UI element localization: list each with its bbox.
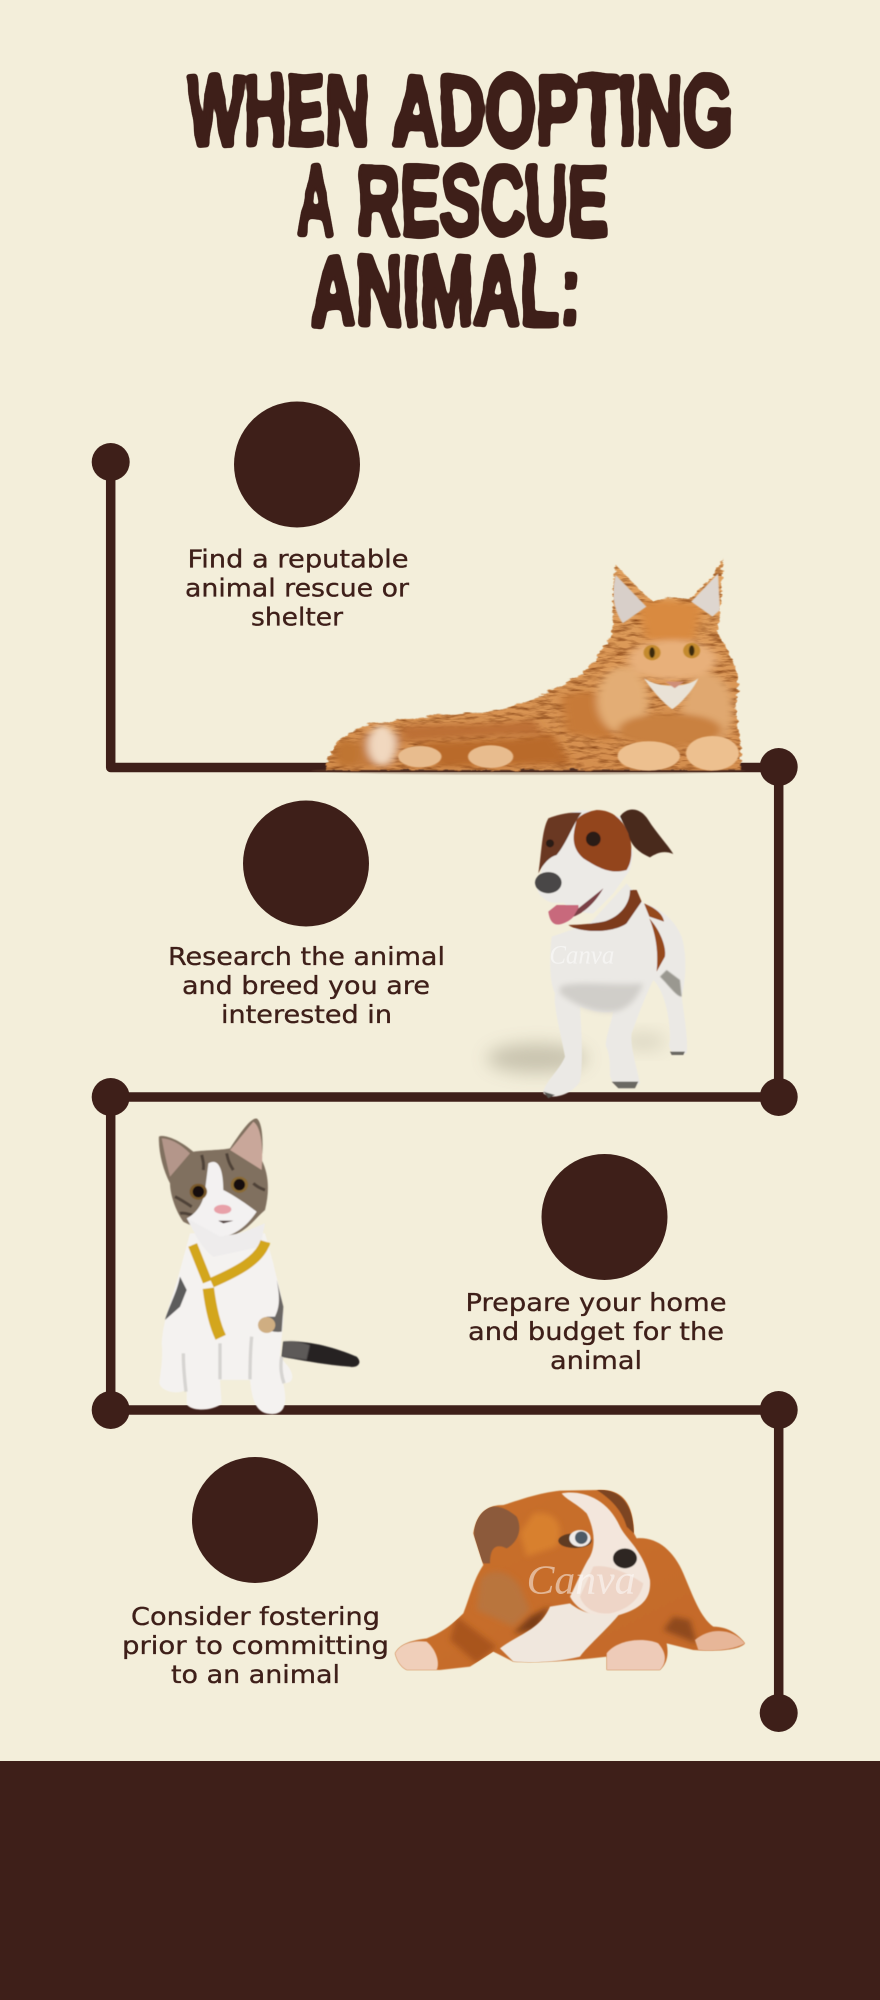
icon: orange cat [311,558,746,775]
panel: step 1 [185,402,410,632]
title: WHEN [187,55,369,167]
step 2 circle [243,800,369,926]
step 3 text: animal [550,1346,642,1375]
step 1 text: animal rescue or [185,574,410,602]
icon: kitten with yellow harness [159,1118,359,1414]
step 2 text: and breed you are [182,971,430,1000]
step 2 text: Research the animal [168,942,445,971]
step 1 text: Find a reputable [188,544,408,574]
step 1 circle [234,402,360,528]
step 2 text [168,942,445,1029]
title: ANIMAL: [310,235,581,347]
step 4 circle [192,1457,318,1583]
step 3 text: Prepare your home [466,1288,726,1317]
step 3 text: and budget for the [468,1317,724,1346]
icon: jack russell dog: Canva [549,939,614,969]
step 4 text: prior to committing [122,1631,389,1660]
step 3 circle [542,1154,668,1280]
panel: step 4 [122,1457,389,1689]
step 4 text [122,1602,389,1689]
panel: step 2 [168,800,445,1029]
step 1 text: shelter [251,602,344,632]
title: A [298,145,334,257]
icon: jack russell dog [487,810,687,1098]
footer band [0,1761,880,2000]
step 4 text: to an animal [171,1660,340,1689]
title [187,55,733,347]
step 3 text [466,1288,726,1375]
icon: bulldog puppy: Canva [527,1557,635,1603]
timeline nodes [92,443,798,1732]
step 1 text [185,544,410,632]
title: RESCUE [357,145,608,257]
step 4 text: Consider fostering [131,1602,380,1631]
icon: bulldog puppy [395,1490,745,1670]
step 2 text: interested in [221,1000,392,1029]
panel: step 3 [466,1154,726,1375]
timeline connector [111,462,779,1713]
